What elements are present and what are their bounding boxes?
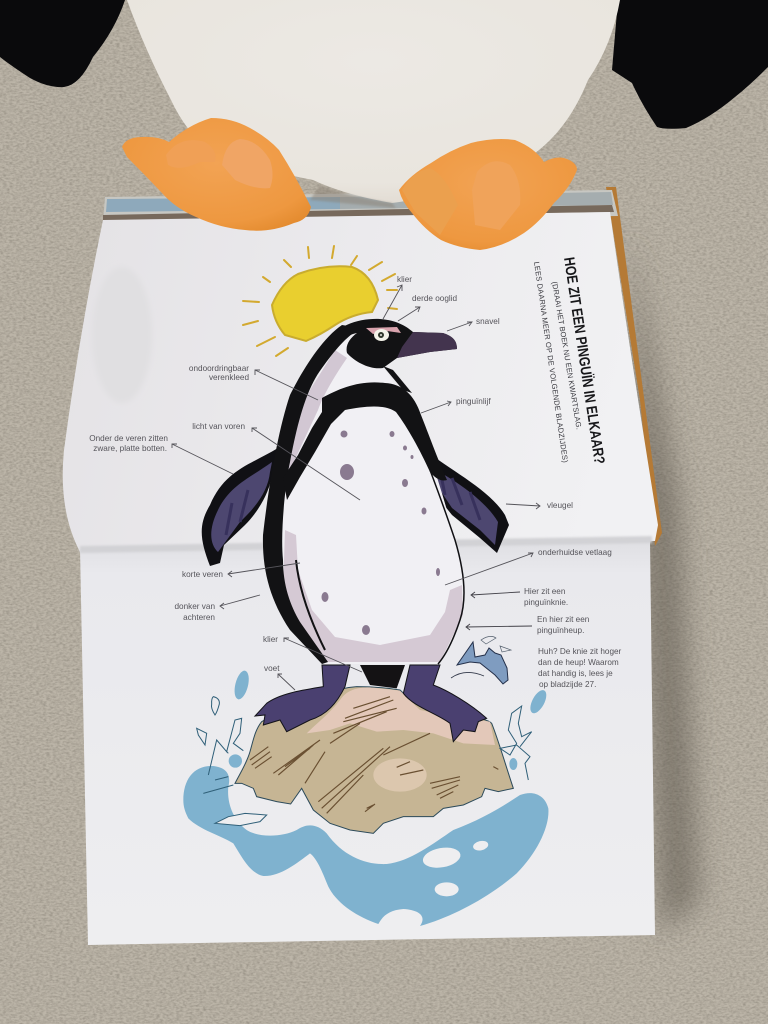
- callout arrows and labels: [89, 275, 622, 690]
- label: pinguinlijf: pinguïnlijf: [456, 397, 491, 406]
- left foot: [255, 665, 350, 732]
- book: [63, 187, 662, 945]
- head: [325, 319, 457, 368]
- label: botten: zware, platte botten.: [93, 444, 167, 453]
- heading: HOE ZIT EEN PINGUÏN IN ELKAAR?: [560, 256, 608, 465]
- text: knie uitleg: Huh? De knie zit hoger: [538, 647, 622, 656]
- plush flipper left: [0, 0, 125, 87]
- upper page: [63, 212, 658, 552]
- label: korte veren: korte veren: [182, 570, 223, 579]
- label: pinguinlijf: [421, 397, 491, 413]
- body right edge: [430, 470, 464, 664]
- faint show-through on upper page: [92, 267, 152, 403]
- label: donker van achteren: achteren: [183, 613, 215, 622]
- text: knie uitleg: [538, 647, 622, 689]
- label: pinguinheup: En hier zit een: [537, 615, 590, 624]
- label: voet: voet: [264, 664, 280, 673]
- dark tail: [360, 665, 405, 688]
- sun: [243, 246, 397, 356]
- body lower left edge: [296, 560, 325, 650]
- label: klier bottom: klier: [263, 635, 278, 644]
- label: snavel: snavel: [476, 317, 500, 326]
- label: pinguinknie: pinguïnknie.: [524, 598, 568, 607]
- label: donker van achteren: [174, 595, 260, 622]
- label: pinguinknie: Hier zit een: [524, 587, 566, 596]
- splash lines: [197, 697, 532, 793]
- subheading line 1: (DRAAI HET BOEK NU EEN KWARTSLAG.: [550, 281, 584, 430]
- label: snavel: [447, 317, 500, 331]
- page fold shadow: [80, 536, 652, 553]
- label: klier bottom: [263, 635, 362, 672]
- label: derde ooglid: derde ooglid: [412, 294, 458, 303]
- subheading line 2: LEES DAARNA MEER OP DE VOLGENDE BLADZIJDES): [532, 261, 570, 464]
- label: derde ooglid: [398, 294, 458, 321]
- body dark back: [263, 325, 360, 664]
- water: [183, 669, 550, 926]
- label: vleugel: vleugel: [547, 501, 573, 510]
- top spine band: [103, 190, 618, 222]
- label: verenkleed: verenkleed: [209, 373, 249, 382]
- book shadow: [630, 230, 700, 935]
- lower page: [80, 541, 655, 945]
- label: botten: Onder de veren zitten: [89, 434, 168, 443]
- foam: [215, 813, 267, 826]
- chest band: [283, 382, 447, 500]
- text: knie uitleg: dan de heup! Waarom: [538, 658, 619, 667]
- label: korte veren: [182, 563, 300, 579]
- label: licht van voren: [192, 422, 360, 500]
- eye: [374, 329, 389, 341]
- label: voet: [264, 664, 295, 690]
- title rotated: [532, 256, 608, 465]
- fish: [451, 636, 511, 684]
- label: verenkleed: ondoordringbaar: [189, 364, 249, 373]
- label: pinguinknie: [471, 587, 568, 607]
- label: botten: [89, 434, 233, 474]
- right wing: [425, 450, 509, 553]
- plush foot left: [122, 118, 311, 231]
- label: verenkleed: [189, 364, 318, 400]
- text: knie uitleg: op bladzijde 27.: [539, 680, 596, 689]
- label: onderhuidse vetlaag: onderhuidse vetlaag: [538, 548, 612, 557]
- plush body: [127, 0, 620, 203]
- label: donker van achteren: donker van: [174, 602, 215, 611]
- right foot: [403, 665, 487, 742]
- label: pinguinheup: [466, 615, 590, 635]
- beak: [397, 332, 457, 358]
- label: onderhuidse vetlaag: [445, 548, 612, 585]
- label: klier top: [383, 275, 412, 319]
- label: klier top: klier: [397, 275, 412, 284]
- plush foot right: [399, 139, 577, 250]
- plush penguin: [0, 0, 768, 250]
- label: pinguinheup: pinguïnheup.: [537, 626, 584, 635]
- label: licht van voren: licht van voren: [192, 422, 245, 431]
- label: vleugel: [506, 501, 573, 510]
- plush flipper right: [612, 0, 768, 129]
- body grey shading: [283, 530, 463, 662]
- body white: [274, 330, 463, 664]
- book cover edge: [606, 187, 662, 546]
- penguin illustration: [202, 319, 513, 833]
- feet: [255, 665, 487, 742]
- chest spots: [322, 430, 440, 635]
- rock: [235, 687, 513, 833]
- text: knie uitleg: dat handig is, lees je: [538, 669, 613, 678]
- left wing: [202, 448, 278, 566]
- neck edge: [383, 366, 412, 393]
- drops: [232, 669, 251, 701]
